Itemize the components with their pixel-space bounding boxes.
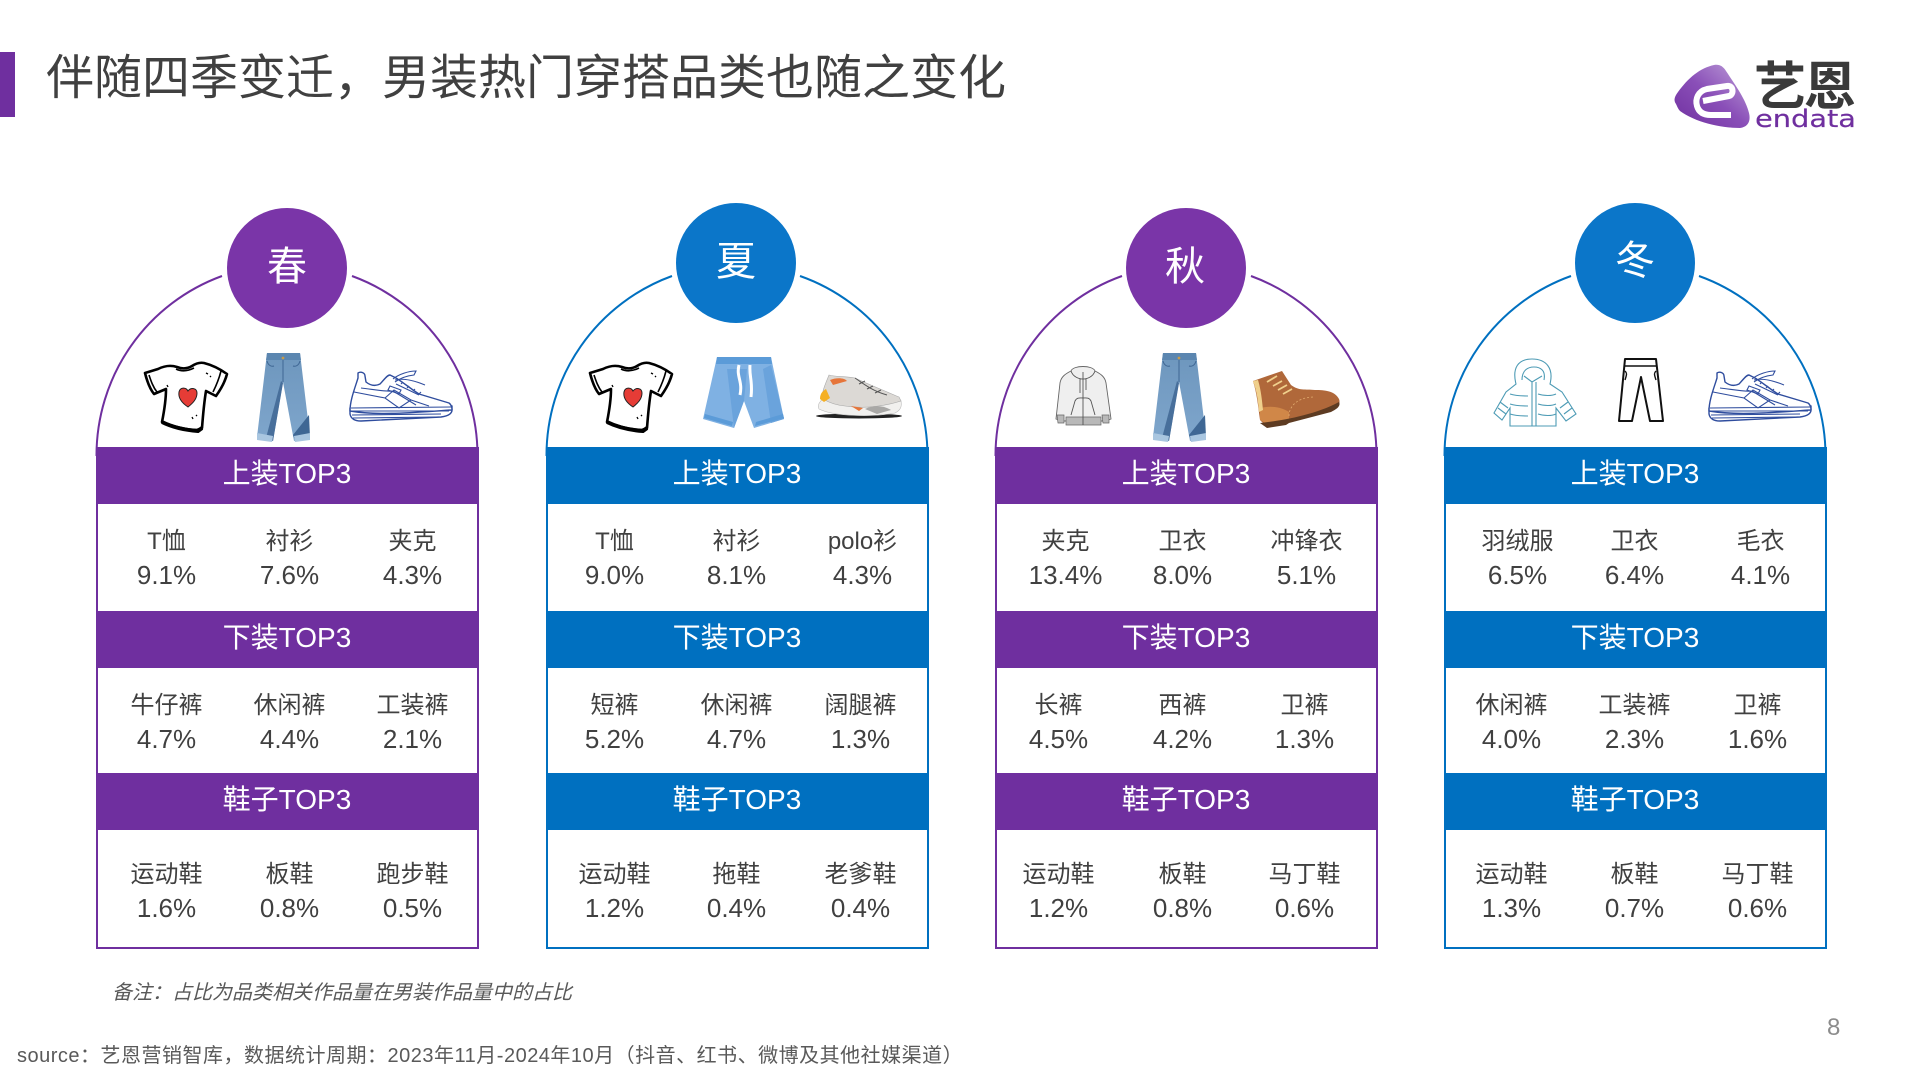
- item: 6.4%: [1605, 560, 1664, 590]
- item: 马丁鞋: [1268, 861, 1340, 888]
- item: [1476, 692, 1548, 754]
- panel: autumn: [994, 208, 1378, 949]
- item: 1.3%: [1482, 892, 1541, 922]
- item: 板鞋: [1610, 861, 1658, 888]
- tops list: [994, 504, 1378, 611]
- item: 5.2%: [585, 724, 644, 754]
- item: [1476, 861, 1548, 922]
- icon: jeans: [1153, 353, 1206, 442]
- item: [1605, 528, 1664, 590]
- item: [1728, 692, 1787, 754]
- tops header: [546, 447, 928, 504]
- item: 羽绒服: [1482, 528, 1554, 555]
- item: 6.5%: [1488, 560, 1547, 590]
- item: 0.4%: [707, 892, 766, 922]
- item: 运动鞋: [578, 861, 650, 888]
- item: [1029, 692, 1088, 754]
- item: 2.1%: [383, 724, 442, 754]
- icon: brown boot: [1253, 371, 1340, 428]
- item: 马丁鞋: [1722, 861, 1794, 888]
- item: [1605, 861, 1664, 922]
- bottoms list: [546, 668, 928, 773]
- shoes header: [546, 773, 928, 830]
- arc: [546, 276, 672, 456]
- item: 卫裤: [1280, 692, 1328, 719]
- title: 伴随四季变迁，男装热门穿搭品类也随之变化: [46, 52, 1006, 105]
- item: 0.4%: [831, 892, 890, 922]
- item: [578, 861, 650, 922]
- tops header: [96, 447, 478, 504]
- shoes header: 鞋子TOP3: [223, 784, 351, 815]
- item: 4.1%: [1731, 560, 1790, 590]
- item: [1268, 861, 1340, 922]
- season badge: 春: 春: [267, 245, 307, 289]
- item: 0.6%: [1275, 892, 1334, 922]
- item: 8.0%: [1153, 560, 1212, 590]
- season badge: 冬: [1575, 203, 1695, 323]
- item: 9.0%: [585, 560, 644, 590]
- arc: [995, 276, 1122, 456]
- item: [383, 528, 442, 590]
- item: [1022, 861, 1094, 922]
- panel: summer: [546, 203, 929, 949]
- item: 1.2%: [585, 892, 644, 922]
- panel: winter: [1444, 203, 1827, 949]
- item: 4.2%: [1153, 724, 1212, 754]
- item: 板鞋: [266, 861, 314, 888]
- icon: sneaker: [350, 371, 452, 421]
- item: [137, 528, 196, 590]
- tops list: [1444, 504, 1826, 611]
- panel: spring: [96, 208, 479, 949]
- item: T恤: [147, 528, 186, 555]
- item: 卫衣: [1158, 528, 1206, 555]
- source: source：艺恩营销智库，数据统计周期：2023年11月-2024年10月（抖音、红书、微博及其他社媒渠道）: [17, 1045, 963, 1067]
- item: 运动鞋: [1022, 861, 1094, 888]
- shoes header: [1444, 773, 1826, 830]
- item: [1598, 692, 1670, 754]
- item: 13.4%: [1029, 560, 1102, 590]
- item: [1153, 861, 1212, 922]
- season badge: 秋: [1126, 208, 1246, 328]
- item: [376, 861, 448, 922]
- item: 运动鞋: [130, 861, 202, 888]
- item: [1270, 528, 1342, 590]
- item: [1482, 528, 1554, 590]
- logo: endata: 艺恩: [1754, 59, 1856, 117]
- item: [1153, 692, 1212, 754]
- item: [130, 692, 202, 754]
- item: 7.6%: [260, 560, 319, 590]
- bottoms header: 下装TOP3: [673, 622, 801, 653]
- logo: endata: endata: [1755, 105, 1856, 133]
- season badge: 冬: 冬: [1615, 239, 1655, 283]
- item: [828, 528, 897, 590]
- item: [376, 692, 448, 754]
- item: 休闲裤: [254, 692, 326, 719]
- item: [824, 692, 896, 754]
- season badge: 秋: 秋: [1165, 245, 1205, 289]
- item: 休闲裤: [1476, 692, 1548, 719]
- item: 4.5%: [1029, 724, 1088, 754]
- item: 长裤: [1034, 692, 1082, 719]
- item: 0.6%: [1728, 892, 1787, 922]
- item: [707, 861, 766, 922]
- arc right: [352, 276, 478, 456]
- item: [260, 861, 319, 922]
- item: 2.3%: [1605, 724, 1664, 754]
- bottoms list: [994, 668, 1378, 773]
- tops header: 上装TOP3: [223, 458, 351, 489]
- item: [1692, 857, 1822, 926]
- item: 老爹鞋: [824, 861, 896, 888]
- bottoms header: [96, 611, 478, 668]
- item: 毛衣: [1736, 528, 1784, 555]
- item: 4.7%: [707, 724, 766, 754]
- footnote: 备注：占比为品类相关作品量在男装作品量中的占比: [112, 982, 572, 1004]
- icon: t-shirt: [145, 363, 227, 431]
- arc: [1444, 276, 1571, 456]
- item: 跑步鞋: [376, 861, 448, 888]
- item: 1.3%: [831, 724, 890, 754]
- arc right: [800, 276, 928, 456]
- logo: endata: [1674, 59, 1856, 133]
- item: 冲锋衣: [1270, 528, 1342, 555]
- item: 工装裤: [1598, 692, 1670, 719]
- bottoms header: 下装TOP3: [1122, 622, 1250, 653]
- item: 卫衣: [1610, 528, 1658, 555]
- icon: sneaker: [1709, 371, 1811, 421]
- bottoms header: [546, 611, 928, 668]
- shoes list: [96, 830, 478, 949]
- shoes header: 鞋子TOP3: [1122, 784, 1250, 815]
- shoes list: [994, 830, 1378, 949]
- icon: puffer jacket: [1494, 359, 1576, 426]
- icon: jeans: [257, 353, 310, 442]
- item: 8.1%: [707, 560, 766, 590]
- item: 牛仔裤: [130, 692, 202, 719]
- tops header: [1444, 447, 1826, 504]
- tops header: [994, 447, 1378, 504]
- item: [1275, 692, 1334, 754]
- item: [260, 528, 319, 590]
- item: [707, 528, 766, 590]
- item: 0.8%: [260, 892, 319, 922]
- bottoms header: 下装TOP3: [223, 622, 351, 653]
- item: 工装裤: [376, 692, 448, 719]
- item: 0.5%: [383, 892, 442, 922]
- item: [585, 692, 644, 754]
- item: 西裤: [1158, 692, 1206, 719]
- item: 阔腿裤: [824, 692, 896, 719]
- item: 4.3%: [833, 560, 892, 590]
- tops header: 上装TOP3: [673, 458, 801, 489]
- tops list: [546, 504, 928, 611]
- item: [585, 528, 644, 590]
- arc right: [1699, 276, 1826, 456]
- item: 4.3%: [383, 560, 442, 590]
- icon: t-shirt: [590, 363, 672, 431]
- item: 夹克: [1042, 528, 1090, 555]
- season badge: 夏: 夏: [716, 240, 756, 284]
- item: 卫裤: [1734, 692, 1782, 719]
- item: 1.3%: [1275, 724, 1334, 754]
- item: 9.1%: [137, 560, 196, 590]
- item: 1.6%: [137, 892, 196, 922]
- icon: hoodie: [1056, 366, 1111, 425]
- shoes header: 鞋子TOP3: [673, 784, 801, 815]
- tops list: [96, 504, 478, 611]
- item: 夹克: [388, 528, 436, 555]
- tops header: 上装TOP3: [1122, 458, 1250, 489]
- icon: chunky dad shoe: [816, 375, 902, 418]
- icon: shorts: [703, 357, 784, 428]
- bottoms list: [1444, 668, 1826, 773]
- item: 4.7%: [137, 724, 196, 754]
- arc right: [1251, 276, 1377, 456]
- item: 0.7%: [1605, 892, 1664, 922]
- item: 短裤: [590, 692, 638, 719]
- item: 0.8%: [1153, 892, 1212, 922]
- item: T恤: [595, 528, 634, 555]
- item: [824, 861, 896, 922]
- item: 5.1%: [1277, 560, 1336, 590]
- item: 休闲裤: [700, 692, 772, 719]
- item: [1029, 528, 1102, 590]
- item: 1.2%: [1029, 892, 1088, 922]
- item: [700, 692, 772, 754]
- bottoms header: 下装TOP3: [1571, 622, 1699, 653]
- item: 拖鞋: [712, 861, 760, 888]
- item: 衬衫: [266, 528, 314, 555]
- season badge: 春: [227, 208, 347, 328]
- season badge: 夏: [676, 203, 796, 323]
- item: 衬衫: [712, 528, 760, 555]
- shoes header: [994, 773, 1378, 830]
- shoes header: [96, 773, 478, 830]
- item: [1153, 528, 1212, 590]
- item: [254, 692, 326, 754]
- item: [130, 861, 202, 922]
- page number: 8: [1827, 1014, 1840, 1041]
- tops header: 上装TOP3: [1571, 458, 1699, 489]
- arc: [96, 276, 222, 456]
- shoes list: [546, 830, 928, 949]
- bottoms header: [994, 611, 1378, 668]
- shoes list: [1444, 830, 1826, 949]
- shoes header: 鞋子TOP3: [1571, 784, 1699, 815]
- item: 板鞋: [1158, 861, 1206, 888]
- title accent bar: [0, 52, 15, 117]
- bottoms list: [96, 668, 478, 773]
- item: 1.6%: [1728, 724, 1787, 754]
- item: 4.0%: [1482, 724, 1541, 754]
- bottoms header: [1444, 611, 1826, 668]
- item: polo衫: [828, 528, 897, 555]
- item: [1731, 528, 1790, 590]
- item: 4.4%: [260, 724, 319, 754]
- item: 运动鞋: [1476, 861, 1548, 888]
- icon: black trousers: [1619, 359, 1663, 421]
